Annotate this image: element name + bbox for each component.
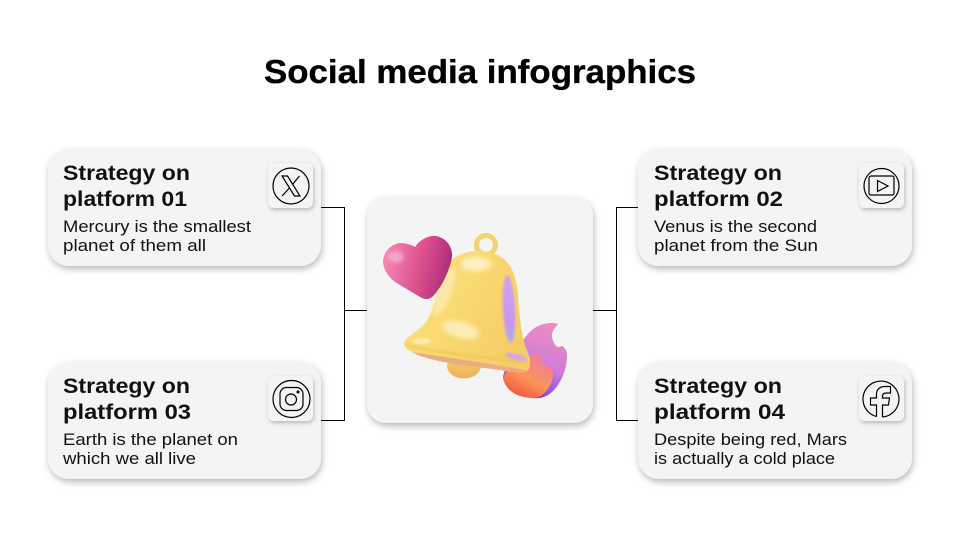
heading: strategy 04 xyxy=(654,374,785,424)
text: strategy 02 description: Venus is the second xyxy=(654,217,817,236)
text: strategy 03 description xyxy=(62,430,238,468)
panel: strategy 01 xyxy=(48,149,321,266)
heading: strategy 02: Strategy on xyxy=(654,161,782,185)
text: strategy 02 description: planet from the Sun xyxy=(654,236,818,255)
icon: heart xyxy=(383,236,452,299)
heading: strategy 04: Strategy on xyxy=(654,374,782,398)
text: strategy 04 description: Despite being red, Mars xyxy=(654,430,847,449)
panel: strategy 03 xyxy=(48,362,321,479)
text: strategy 02 description xyxy=(654,217,818,255)
icon: bell loop xyxy=(476,236,496,254)
text: strategy 01 description xyxy=(63,217,251,255)
heading: strategy 01: Strategy on xyxy=(63,161,190,185)
text: strategy 01 description: Mercury is the smallest xyxy=(63,217,251,236)
icon: X xyxy=(268,163,313,208)
icon: bell clapper xyxy=(447,354,481,378)
text: strategy 04 description xyxy=(654,430,847,468)
icon: Facebook xyxy=(859,376,904,421)
heading: strategy 03 xyxy=(63,374,191,424)
heading: strategy 01: platform 01 xyxy=(63,187,187,211)
panel: strategy 04 xyxy=(638,362,912,479)
heading: strategy 01 xyxy=(63,161,190,211)
text: strategy 03 description: Earth is the planet on xyxy=(63,430,238,449)
heading: strategy 02: platform 02 xyxy=(654,187,783,211)
heading: strategy 04: platform 04 xyxy=(654,400,785,424)
title: Social media infographics xyxy=(264,53,696,90)
text: strategy 04 description: is actually a cold place xyxy=(654,449,835,468)
heading: strategy 02 xyxy=(654,161,783,211)
connector: left bracket xyxy=(321,208,367,420)
panel: strategy 02 xyxy=(638,149,912,266)
heading: strategy 03: platform 03 xyxy=(63,400,191,424)
connector: right bracket xyxy=(593,208,638,420)
icon: YouTube xyxy=(859,163,904,208)
icon: Instagram xyxy=(268,376,313,421)
icon: flame xyxy=(503,323,567,398)
text: strategy 03 description: which we all live xyxy=(62,449,196,468)
panel: central image xyxy=(367,197,593,423)
icon: bell xyxy=(404,251,530,372)
heading: strategy 03: Strategy on xyxy=(63,374,190,398)
text: strategy 01 description: planet of them all xyxy=(63,236,206,255)
